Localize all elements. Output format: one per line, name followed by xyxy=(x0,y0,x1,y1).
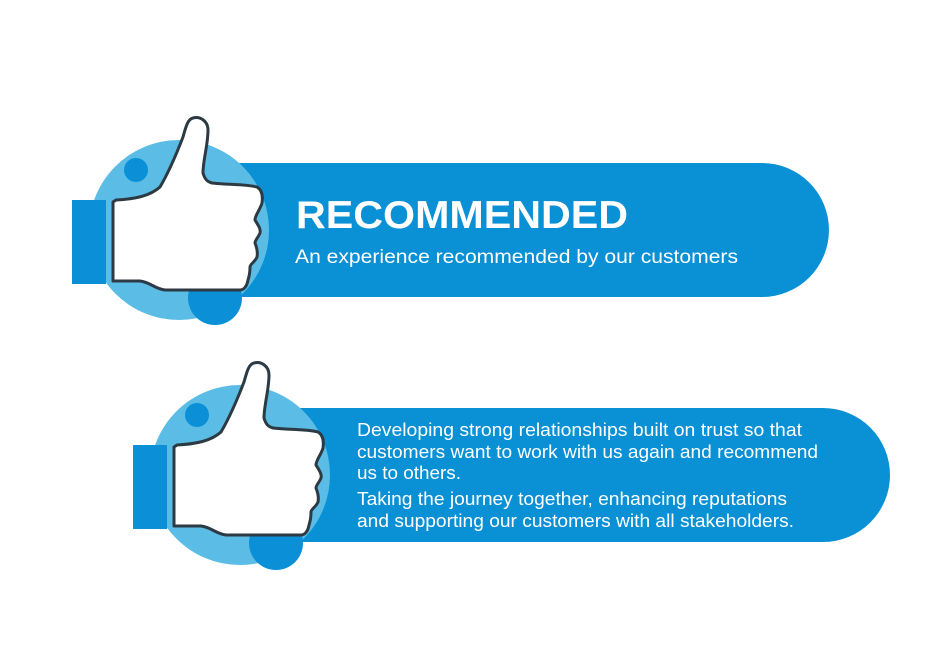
description text: us to others. xyxy=(357,463,461,483)
description text: and supporting our customers with all stakeholders. xyxy=(357,511,794,531)
icon: thumbs up xyxy=(133,363,330,570)
description text: customers want to work with us again and recommend xyxy=(357,442,818,462)
description text: Taking the journey together, enhancing reputations xyxy=(357,489,787,509)
banner shape xyxy=(290,408,890,542)
icon: thumbs up xyxy=(72,118,269,325)
subtitle: An experience recommended by our customers xyxy=(295,247,738,268)
description text xyxy=(357,420,818,531)
description text: Developing strong relationships built on trust so that xyxy=(357,420,802,440)
heading: RECOMMENDED xyxy=(296,194,628,237)
banner shape xyxy=(230,163,829,297)
panel: description banner xyxy=(133,363,890,570)
panel: recommended banner xyxy=(72,118,829,325)
